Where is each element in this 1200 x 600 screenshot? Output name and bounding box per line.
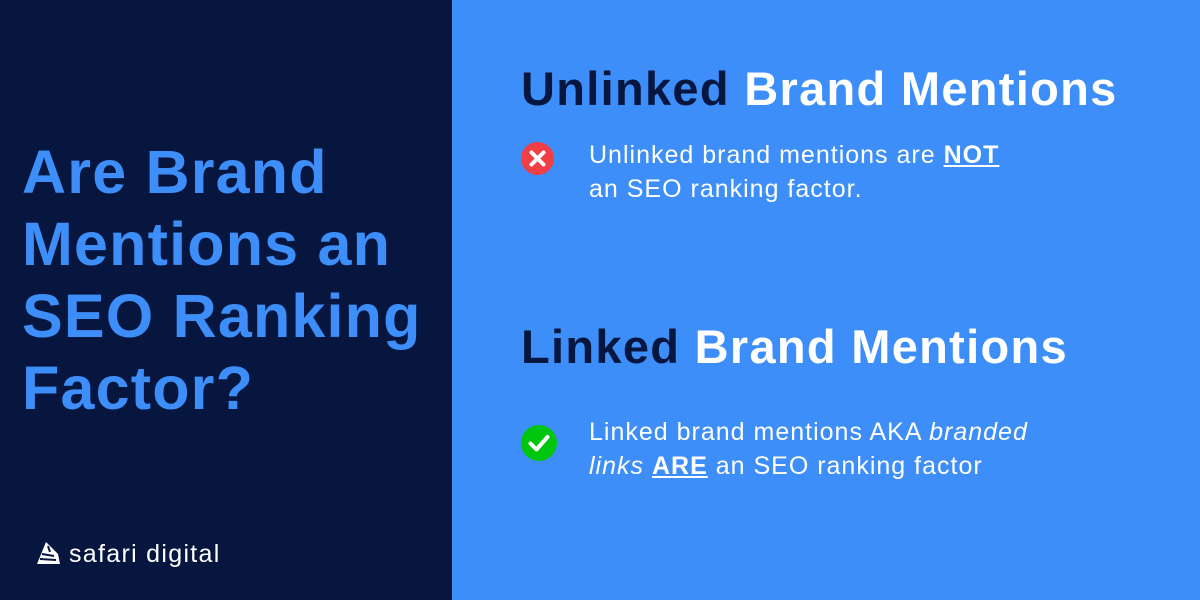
title: [22, 138, 422, 422]
heading: unlinked: Unlinked Brand Mentions: [521, 62, 1118, 115]
panel: left: [0, 0, 452, 600]
icon: green check: [521, 425, 557, 461]
logo: safari digital: [69, 540, 221, 568]
panel: right: [452, 0, 1200, 600]
title: Are Brand: [22, 138, 328, 206]
text: unlinked: an SEO ranking factor.: [589, 175, 863, 203]
title: Mentions an: [22, 210, 391, 278]
icon: red x: [521, 142, 554, 175]
text: linked: links ARE an SEO ranking factor: [589, 452, 983, 480]
text: linked: Linked brand mentions AKA branded: [589, 418, 1028, 446]
text: linked: [589, 418, 1028, 480]
title: Factor?: [22, 354, 254, 422]
title: SEO Ranking: [22, 282, 422, 350]
text: unlinked: [589, 141, 1000, 203]
heading: linked: Linked Brand Mentions: [521, 320, 1068, 373]
text: unlinked: Unlinked brand mentions are NOT: [589, 141, 999, 169]
